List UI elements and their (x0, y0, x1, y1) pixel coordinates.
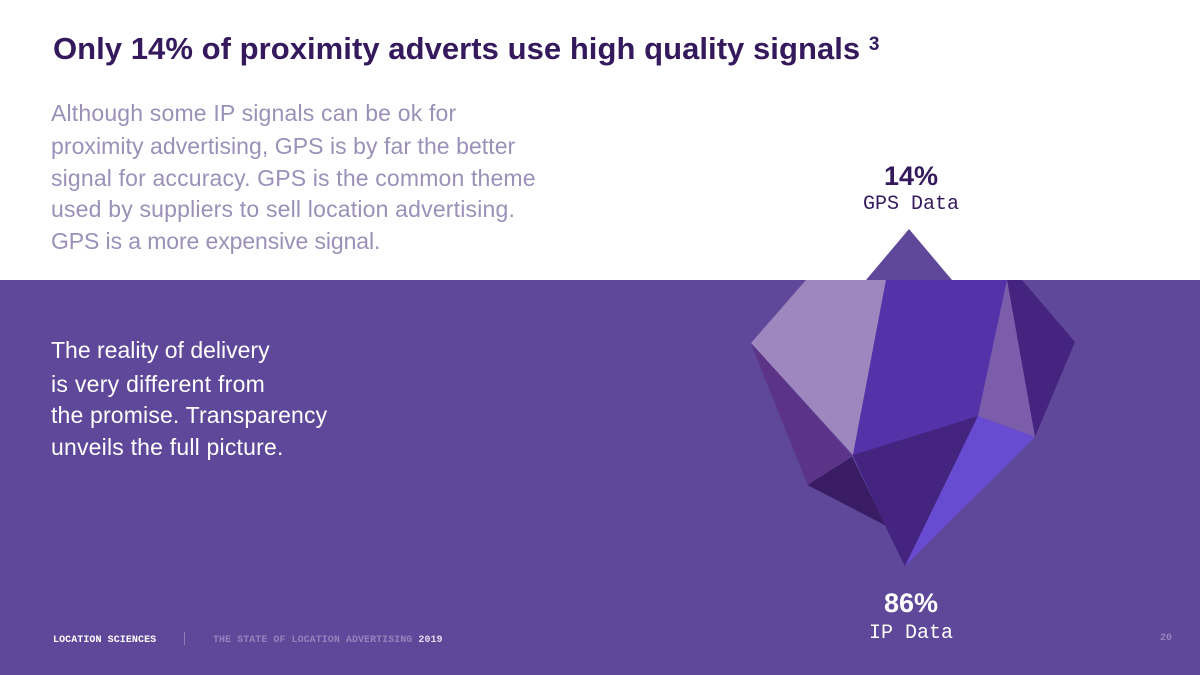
footer: brand name: LOCATION SCIENCES (53, 635, 156, 646)
footer: page number: 20 (1160, 633, 1172, 644)
footer: report title: THE STATE OF LOCATION ADVERTISING 2019 (213, 635, 443, 646)
text block: reality of delivery: unveils the full picture. (51, 434, 284, 460)
text block: intro paragraph (51, 100, 536, 254)
text block: intro paragraph: GPS is a more expensive signal. (51, 228, 380, 254)
text block: intro paragraph: used by suppliers to sell location advertising. (51, 196, 515, 222)
label: 86% IP Data (869, 588, 953, 645)
label: 86% IP Data: IP Data (869, 622, 953, 645)
label: 14% GPS Data: 14% (884, 161, 938, 191)
title: Only 14% of proximity adverts use high quality signals 3 (53, 31, 879, 66)
panel: purple lower background (0, 280, 1200, 675)
text block: intro paragraph: signal for accuracy. GPS is the common theme (51, 165, 536, 191)
text block: intro paragraph: Although some IP signals can be ok for (51, 100, 456, 126)
text block: intro paragraph: proximity advertising, GPS is by far the better (51, 133, 515, 159)
text block: reality of delivery: is very different from (51, 371, 265, 397)
label: 14% GPS Data (863, 161, 959, 216)
text block: reality of delivery (51, 337, 328, 460)
text block: reality of delivery: the promise. Transparency (51, 402, 327, 428)
text block: reality of delivery: The reality of delivery (51, 337, 270, 363)
footer: separator (184, 632, 185, 645)
label: 14% GPS Data: GPS Data (863, 193, 959, 216)
label: 86% IP Data: 86% (884, 588, 938, 618)
